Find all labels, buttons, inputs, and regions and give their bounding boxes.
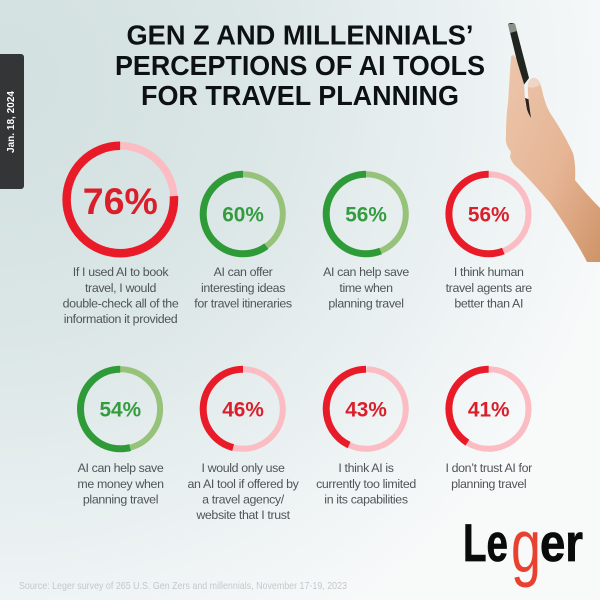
title — [115, 20, 485, 111]
labels: top row: double-check all of the — [63, 296, 179, 310]
donut: 60% — [203, 174, 283, 254]
donut: 43% — [326, 369, 406, 449]
labels: bottom row: website that I trust — [195, 508, 291, 522]
labels: top row — [63, 265, 532, 326]
labels: bottom row: a travel agency/ — [202, 492, 285, 506]
donut: 41%: 41% — [468, 398, 510, 422]
donut: 46%: 46% — [222, 398, 264, 422]
labels: bottom row: AI can help save — [78, 461, 164, 475]
title: FOR TRAVEL PLANNING — [141, 80, 459, 111]
labels: bottom row — [77, 461, 532, 522]
labels: top row: AI can offer — [214, 265, 273, 279]
donut: 46% — [203, 369, 283, 449]
labels: top row: planning travel — [328, 296, 404, 310]
donut: 56% red: 56% — [468, 204, 510, 226]
donut: 54% — [81, 369, 160, 449]
labels: bottom row: in its capabilities — [324, 492, 408, 506]
donut: 56% red — [449, 174, 528, 254]
labels: bottom row: me money when — [77, 477, 164, 491]
date tab: Jan. 18, 2024 — [5, 91, 17, 153]
donut: 41% — [449, 369, 528, 449]
labels: top row: for travel itineraries — [194, 296, 292, 310]
labels: top row: travel, I would — [85, 281, 156, 295]
donut: 60%: 60% — [222, 204, 264, 226]
logo: Leger — [463, 504, 583, 588]
logo: Leger: Le — [463, 514, 508, 573]
labels: top row: better than AI — [454, 296, 523, 310]
source note: Source: Leger survey of 265 U.S. Gen Zers and millennials, November 17-19, 2023 — [19, 581, 347, 592]
labels: top row: interesting ideas — [201, 281, 285, 295]
title: GEN Z AND MILLENNIALS’ — [126, 20, 474, 50]
donut: 76% — [67, 146, 174, 253]
labels: bottom row: planning travel — [83, 492, 158, 506]
icon: hand holding phone — [506, 23, 600, 262]
logo: Leger: g — [511, 504, 541, 588]
labels: top row: information it provided — [64, 312, 178, 326]
labels: bottom row: I think AI is — [338, 461, 394, 475]
labels: top row: AI can help save — [323, 265, 409, 279]
donut: 56% green: 56% — [345, 204, 387, 226]
date tab — [0, 54, 24, 189]
labels: top row: If I used AI to book — [73, 265, 169, 279]
labels: bottom row: I don’t trust AI for — [445, 461, 532, 475]
donut: 54%: 54% — [99, 398, 141, 422]
labels: bottom row: currently too limited — [316, 477, 416, 491]
labels: bottom row: planning travel — [451, 477, 526, 491]
labels: bottom row: an AI tool if offered by — [188, 477, 300, 491]
donut: 76%: 76% — [83, 180, 158, 222]
logo: Leger: er — [540, 514, 583, 573]
labels: bottom row: I would only use — [201, 461, 285, 475]
donut: 43%: 43% — [345, 398, 387, 422]
title: PERCEPTIONS OF AI TOOLS — [115, 50, 485, 81]
labels: top row: time when — [339, 281, 393, 295]
donut: 56% green — [326, 174, 406, 254]
labels: top row: travel agents are — [446, 281, 532, 295]
labels: top row: I think human — [454, 265, 524, 279]
